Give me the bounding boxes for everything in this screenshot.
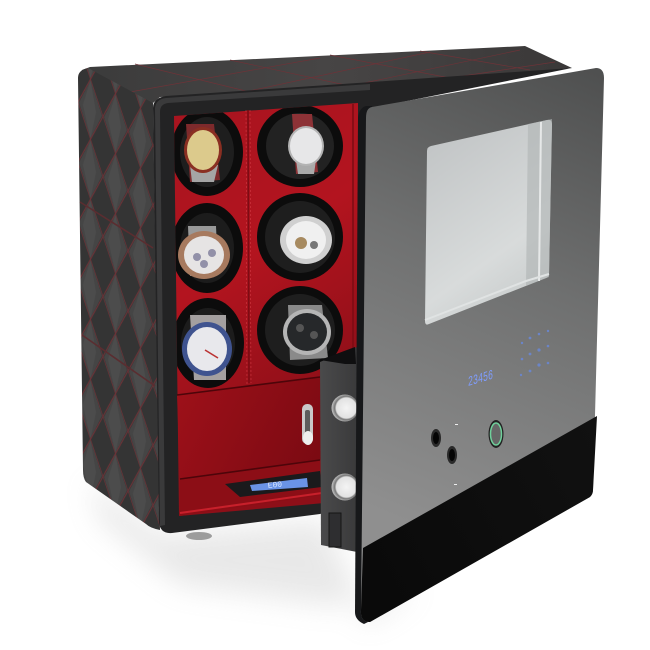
tray display xyxy=(225,471,322,497)
product photo: watch winder safe xyxy=(78,46,604,624)
door inner bracket xyxy=(320,347,358,552)
bracket slot xyxy=(329,513,341,547)
winder: middle right, skeleton watch xyxy=(257,193,343,281)
key holes xyxy=(431,429,457,464)
winder: top right, silver watch xyxy=(257,105,343,187)
door glass xyxy=(361,68,604,622)
winder: bottom right, dark chronograph xyxy=(257,286,343,374)
winder rows xyxy=(171,105,343,388)
cabinet top face xyxy=(78,46,572,103)
cabinet side face quilted leather xyxy=(78,68,160,530)
tray display: E00 xyxy=(267,481,283,491)
door edge xyxy=(355,106,372,624)
winder: middle left, rose bezel watch xyxy=(171,203,243,293)
upper lock bolt xyxy=(332,394,358,422)
floor shadow xyxy=(90,480,420,625)
touch keypad dots xyxy=(520,330,549,376)
drawer xyxy=(177,377,322,479)
winder: bottom left, blue bezel watch xyxy=(172,298,244,388)
status marks xyxy=(454,424,458,485)
column seams xyxy=(248,104,353,383)
viewing window xyxy=(425,119,552,325)
drawer latch xyxy=(302,404,313,445)
cabinet foot xyxy=(186,532,212,540)
black lower band xyxy=(361,416,597,622)
door panel xyxy=(355,68,604,624)
red interior xyxy=(174,103,358,516)
cabinet front frame xyxy=(153,68,572,533)
digital code display: 23456 xyxy=(468,367,493,390)
side seams xyxy=(80,202,155,386)
drawer tray xyxy=(180,461,322,516)
fingerprint button xyxy=(488,420,504,448)
winder: top left, gold watch xyxy=(171,108,243,196)
lower lock bolt xyxy=(332,474,358,500)
